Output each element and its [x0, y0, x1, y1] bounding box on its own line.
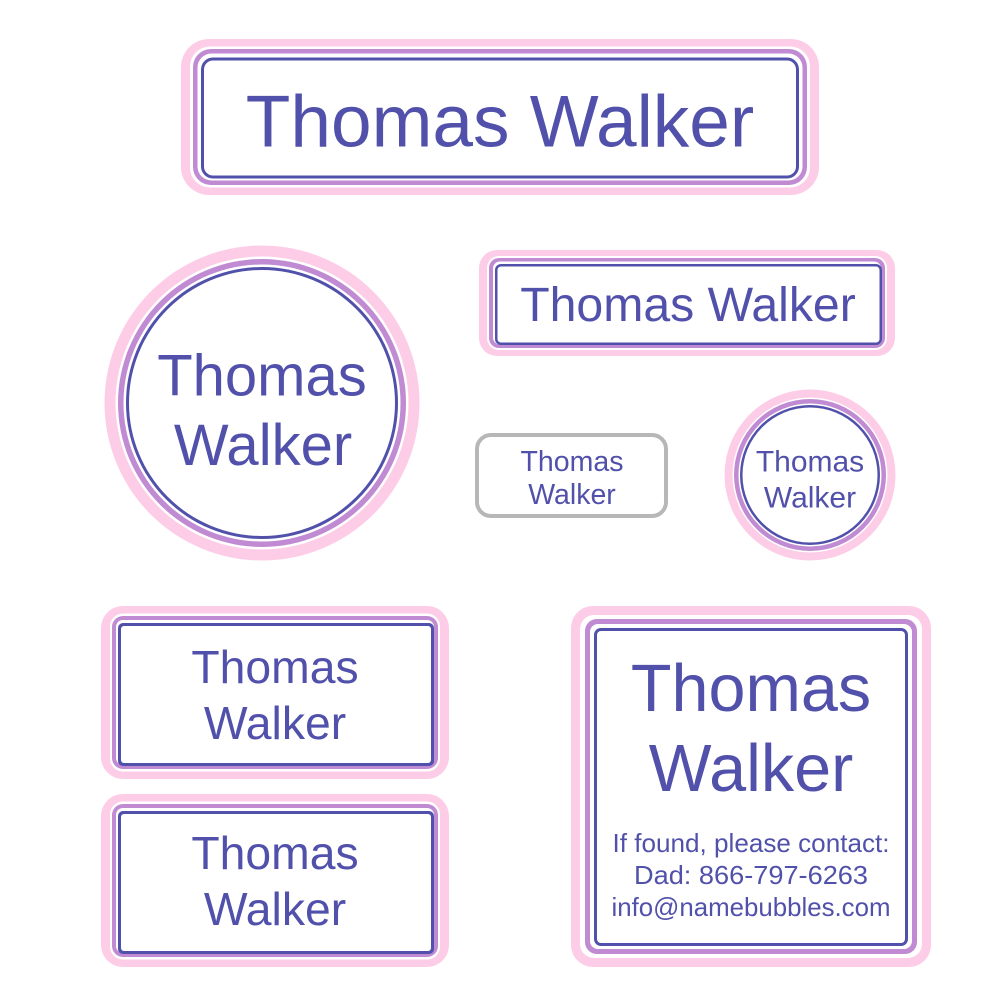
label: large rectangle name label: [181, 39, 819, 195]
contact text: [612, 828, 890, 922]
label: medium rectangle name label: Thomas Walker: [520, 278, 856, 332]
label: lower-left rectangle label, bottom: [101, 794, 449, 967]
label: small grey outlined label: Walker: [528, 479, 616, 511]
label: small grey outlined label: [477, 435, 666, 516]
label: large rectangle name label: Thomas Walker: [246, 82, 754, 162]
label: lower-left rectangle label, bottom: Walker: [204, 883, 346, 935]
label: square label with contact details: [571, 606, 931, 967]
label: lower-left rectangle label, top: Thomas: [191, 641, 359, 693]
label: lower-left rectangle label, top: Walker: [204, 697, 346, 749]
contact text: If found, please contact:: [612, 828, 890, 858]
label: square label with contact details: Walker: [649, 732, 853, 806]
label: small grey outlined label: Thomas: [521, 446, 623, 478]
label: small circle name label: [724, 390, 896, 560]
label: large circle name label: [104, 246, 420, 560]
label: medium rectangle name label: [479, 250, 895, 356]
contact text: Dad: 866-797-6263: [634, 860, 868, 890]
label: lower-left rectangle label, top: [101, 606, 449, 779]
label: small circle name label: Thomas: [756, 446, 864, 478]
label: lower-left rectangle label, bottom: Thomas: [191, 827, 359, 879]
label: square label with contact details: Thomas: [631, 652, 871, 726]
contact text: info@namebubbles.com: [612, 892, 890, 922]
label: large circle name label: Walker: [174, 413, 352, 478]
label: large circle name label: Thomas: [157, 344, 367, 408]
label: small circle name label: Walker: [764, 482, 856, 514]
